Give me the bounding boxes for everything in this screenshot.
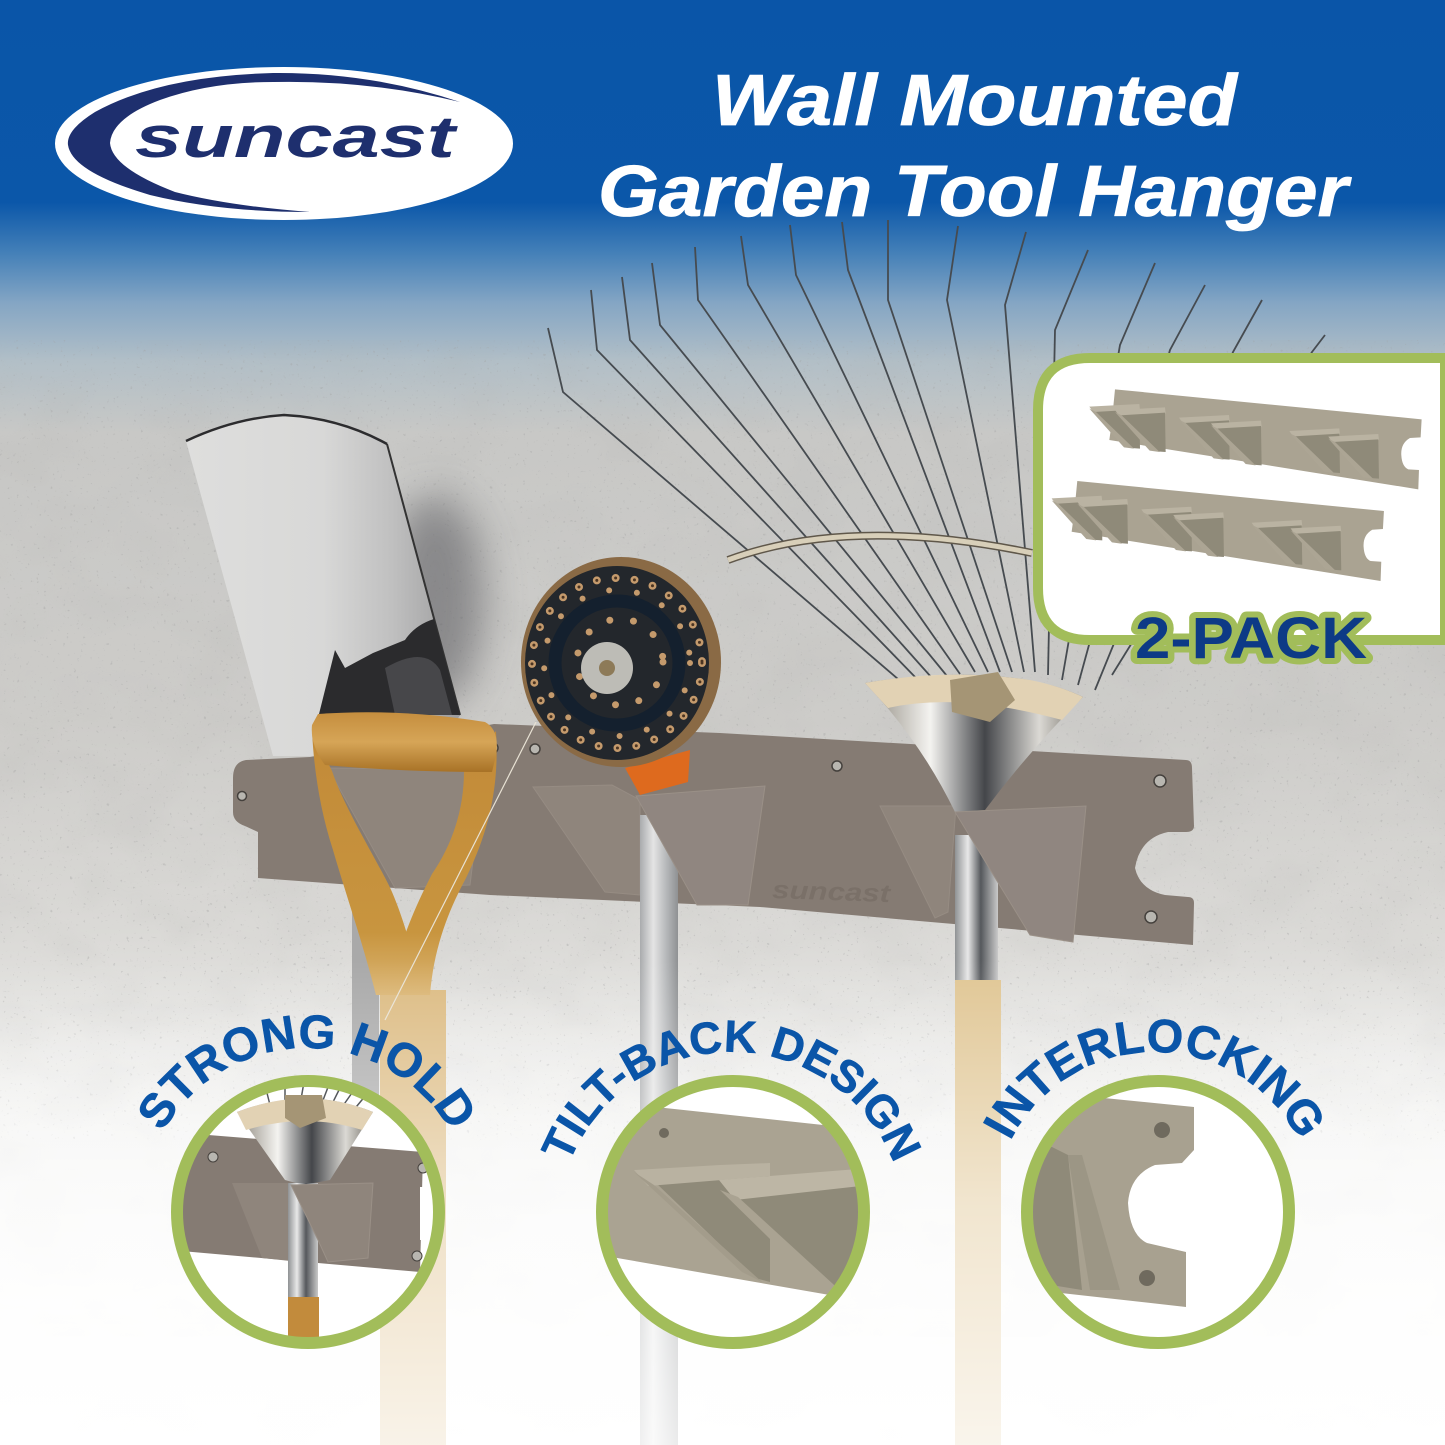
- feature: strong hold: [140, 1014, 472, 1349]
- bracket 1: [1089, 389, 1422, 489]
- logo oval: [55, 67, 513, 220]
- logo wordmark: suncast: [135, 105, 459, 170]
- title line 2: Garden Tool Hanger: [598, 152, 1352, 232]
- rake handle: metal ferrule: [955, 835, 998, 985]
- circle: tilt-back detail: [600, 1081, 870, 1343]
- fade of tools into white at the bottom: [0, 960, 1445, 1445]
- panel: 2-pack inset: [1038, 358, 1445, 671]
- bracket 2: [1052, 481, 1384, 581]
- rake fan head: [865, 675, 1083, 812]
- heading: strong hold: STRONG HOLD: [140, 1014, 472, 1128]
- rake handle: wood: [955, 980, 1001, 1445]
- circle: interlocking detail: [1020, 1081, 1289, 1343]
- left arm: [312, 731, 424, 995]
- circle: strong hold detail: [170, 1081, 439, 1347]
- pole under shower head: [640, 815, 678, 1445]
- heading: interlocking: INTERLOCKING: [983, 1019, 1322, 1139]
- 2-pack label: 2-PACK: [1135, 606, 1367, 671]
- heading: tilt-back design: TILT-BACK DESIGN: [540, 1020, 922, 1162]
- shovel handle: lower wood: [380, 990, 446, 1445]
- feature: tilt-back design: [540, 1020, 922, 1349]
- shovel shaft: [352, 880, 379, 1140]
- shovel D-grip handle: [312, 712, 497, 995]
- title: [598, 61, 1352, 232]
- shovel dark reflection: [319, 619, 460, 715]
- rail front fins: [636, 786, 1086, 942]
- rake cross bar: [728, 536, 1032, 560]
- rail screws: [238, 743, 1166, 923]
- right arm: [388, 731, 497, 995]
- rail logo: suncast: [772, 876, 893, 908]
- title line 1: Wall Mounted: [712, 61, 1239, 141]
- rake: [548, 220, 1325, 812]
- garden tool hanger rail: [233, 724, 1194, 945]
- shower head: [521, 557, 721, 795]
- feature: interlocking: [983, 1019, 1322, 1349]
- thin line across handle: [385, 722, 536, 1020]
- logo: [55, 67, 513, 220]
- orange connector: [625, 750, 690, 795]
- shovel blade: [186, 415, 460, 756]
- rake tines: [548, 220, 1325, 690]
- logo swoosh: [68, 73, 460, 212]
- rail back fins: [328, 768, 956, 918]
- shadow behind shovel: [385, 495, 485, 705]
- grip: [312, 712, 497, 772]
